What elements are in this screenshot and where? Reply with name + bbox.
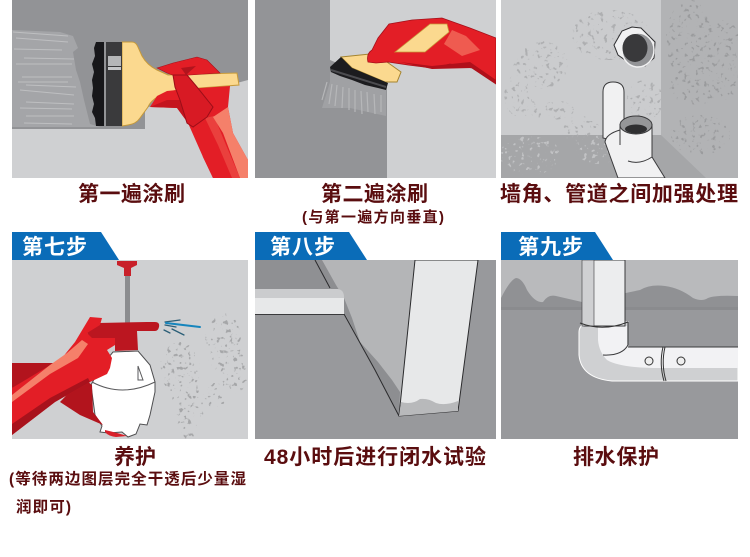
icon: red glove hand	[150, 57, 248, 178]
icon: scraper brush	[330, 54, 401, 90]
tab: step 8: 第八步	[270, 236, 335, 259]
icon: red glove hand	[368, 18, 496, 84]
heading: corner reinforcement: 墙角、管道之间加强处理	[500, 182, 738, 206]
white membrane strip	[399, 260, 478, 416]
wall wedge	[322, 260, 414, 405]
note: perpendicular direction: (与第一遍方向垂直)	[302, 208, 444, 226]
note: curing instructions	[9, 469, 246, 516]
note: curing instructions: (等待两边图层完全干透后少量湿	[9, 469, 246, 488]
brushed drips	[322, 72, 386, 116]
icon: upper pipe	[614, 27, 655, 67]
spray mist	[160, 312, 248, 440]
icon: spray droplets	[164, 320, 200, 335]
tab: step 9	[501, 232, 613, 260]
panel: second coat illustration	[255, 0, 496, 178]
tab: step 9: 第九步	[518, 236, 583, 259]
tab: step 8	[255, 232, 367, 260]
icon: drain pipe elbow	[579, 260, 738, 381]
panel: corner and pipe reinforcement illustration	[500, 0, 743, 178]
heading: 48 hour water test: 48小时后进行闭水试验	[264, 445, 486, 469]
icon: pressure sprayer	[87, 261, 159, 437]
heading: drainage protection: 排水保护	[573, 446, 659, 469]
panel: first coat illustration	[12, 0, 248, 178]
panel: step 9 drainage protection illustration	[501, 260, 738, 439]
panel: step 7 curing illustration	[12, 260, 248, 440]
heading: curing: 养护	[114, 446, 156, 469]
tab: step 7: 第七步	[22, 236, 87, 259]
icon: lower pipe elbow	[603, 82, 665, 178]
note: curing instructions: 润即可)	[16, 497, 71, 516]
heading: second coat: 第二遍涂刷	[321, 182, 428, 206]
finger over handle	[173, 75, 213, 127]
icon: red glove arm	[12, 317, 115, 435]
ledge	[255, 289, 344, 314]
wall speckle	[500, 0, 743, 175]
panel: step 8 closed water test illustration	[255, 260, 496, 439]
painted patch	[12, 30, 100, 127]
icon: paint brush	[92, 42, 239, 126]
tab: step 7	[12, 232, 119, 260]
heading: first coat: 第一遍涂刷	[78, 182, 185, 206]
